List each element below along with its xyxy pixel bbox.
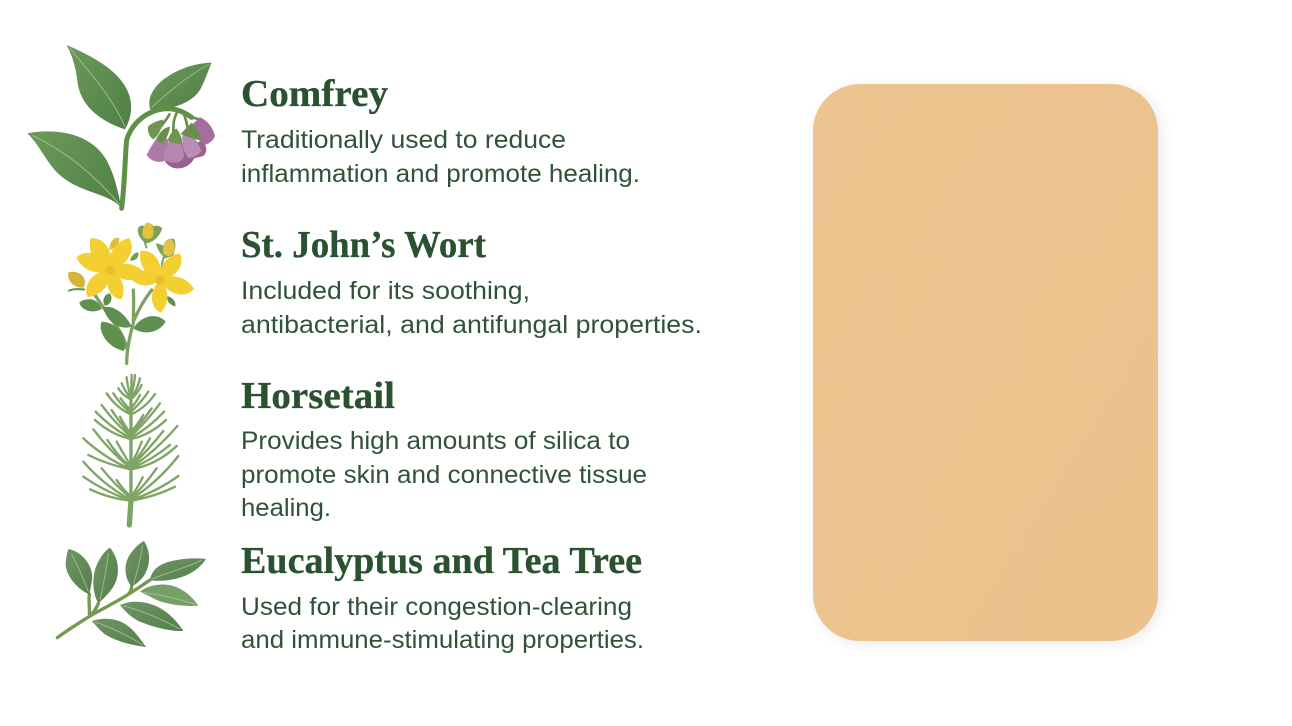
flower 1 <box>74 233 144 302</box>
text: Eucalyptus and Tea Tree description <box>241 593 644 654</box>
text: Comfrey description <box>241 126 640 188</box>
text: Horsetail description: promote skin and connective tissue <box>241 461 647 489</box>
text: St. John's Wort description: Included for its soothing, <box>241 277 530 305</box>
icon: eucalyptus and tea tree <box>57 541 206 647</box>
icon: St. John's Wort <box>68 222 196 363</box>
text: Horsetail description: Provides high amounts of silica to <box>241 427 630 455</box>
text: St. John's Wort description: antibacterial, and antifungal properties. <box>241 311 702 339</box>
panel: skin-toned patch <box>813 84 1162 644</box>
heading: St. John's Wort: St. John’s Wort <box>241 224 486 266</box>
text: Eucalyptus and Tea Tree description: Used for their congestion-clearing <box>241 593 632 621</box>
text: Comfrey description: Traditionally used to reduce <box>241 126 566 154</box>
icon: horsetail <box>83 375 178 525</box>
heading: Comfrey: Comfrey <box>241 73 388 115</box>
text: St. John's Wort description <box>241 277 702 339</box>
heading: Horsetail: Horsetail <box>241 375 395 417</box>
flower 2 <box>128 246 196 313</box>
icon: comfrey <box>27 45 215 208</box>
text: Eucalyptus and Tea Tree description: and immune-stimulating properties. <box>241 626 644 654</box>
heading: Eucalyptus and Tea Tree: Eucalyptus and Tea Tree <box>241 540 642 582</box>
text: Comfrey description: inflammation and promote healing. <box>241 160 640 188</box>
text: Horsetail description <box>241 427 647 522</box>
text: Horsetail description: healing. <box>241 494 331 522</box>
